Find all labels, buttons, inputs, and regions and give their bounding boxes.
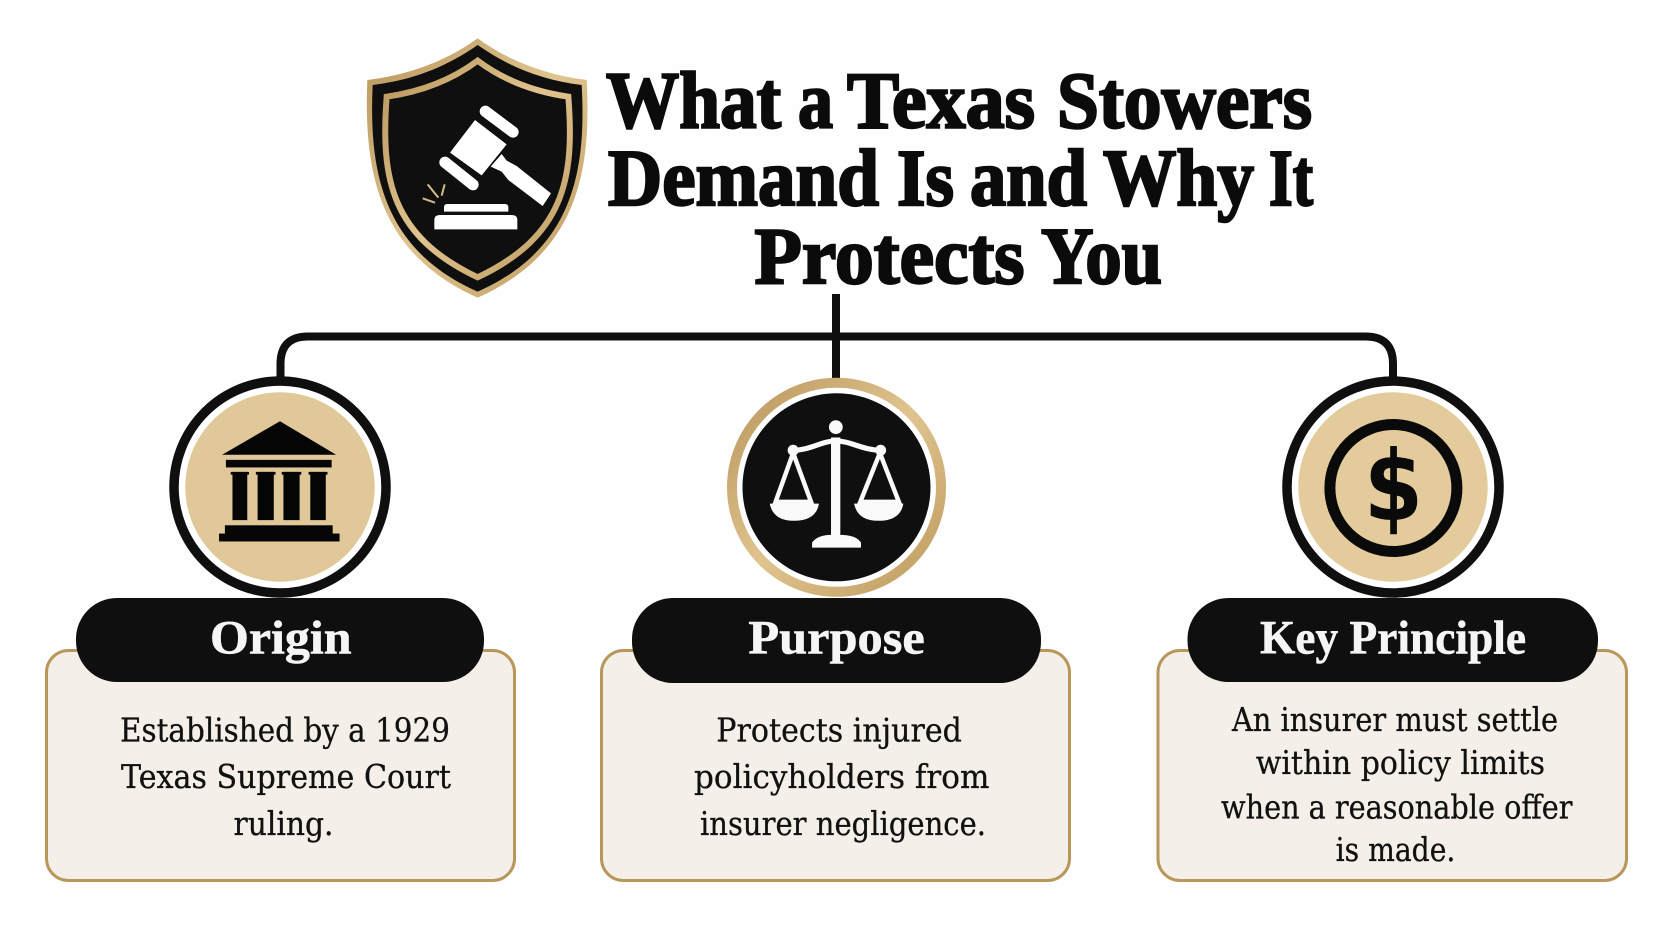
text: key principle [1221, 700, 1573, 869]
title: It [1269, 135, 1313, 223]
icon: shield with gavel [367, 38, 588, 298]
title: Stowers [1057, 58, 1312, 146]
panel: key principle [1158, 381, 1626, 880]
icon: courthouse [174, 381, 386, 593]
text: key principle: An insurer must settle [1231, 700, 1558, 739]
heading pill: purpose: Purpose [748, 611, 925, 664]
title: Protects [754, 213, 1024, 301]
title: Demand [608, 135, 879, 223]
text: key principle: when a reasonable offer [1221, 788, 1573, 827]
text: purpose: Protects injured [716, 710, 962, 750]
heading pill: origin [76, 598, 484, 682]
title: Texas [847, 58, 1035, 146]
title [606, 58, 1313, 301]
icon: dollar coin [1287, 381, 1499, 593]
title: Why [1103, 135, 1254, 223]
heading pill: purpose [632, 598, 1041, 683]
title: and [970, 135, 1087, 223]
card: key principle [1158, 650, 1626, 880]
text: origin: Texas Supreme Court [121, 757, 451, 796]
heading pill: origin: Origin [210, 611, 352, 664]
title: a [798, 58, 833, 146]
title: What [606, 58, 781, 146]
connector lines [280, 294, 1393, 378]
title: You [1041, 213, 1162, 301]
panel: origin [46, 381, 514, 880]
text: key principle: within policy limits [1256, 743, 1545, 782]
text: origin: ruling. [234, 804, 334, 843]
heading pill: key principle: Key Principle [1260, 611, 1526, 664]
title: Is [897, 135, 954, 223]
text: purpose [694, 710, 989, 843]
icon: dollar coin: $ [1364, 430, 1423, 543]
panel: purpose [602, 383, 1070, 880]
card: origin [46, 650, 514, 880]
icon: scales of justice [732, 383, 941, 592]
text: purpose: policyholders from [694, 757, 989, 796]
card: purpose [602, 650, 1070, 880]
text: purpose: insurer negligence. [700, 804, 986, 843]
text: origin [120, 710, 451, 843]
text: origin: Established by a 1929 [120, 710, 450, 750]
heading pill: key principle [1188, 598, 1598, 682]
text: key principle: is made. [1336, 830, 1455, 869]
icon: gavel [434, 111, 551, 229]
